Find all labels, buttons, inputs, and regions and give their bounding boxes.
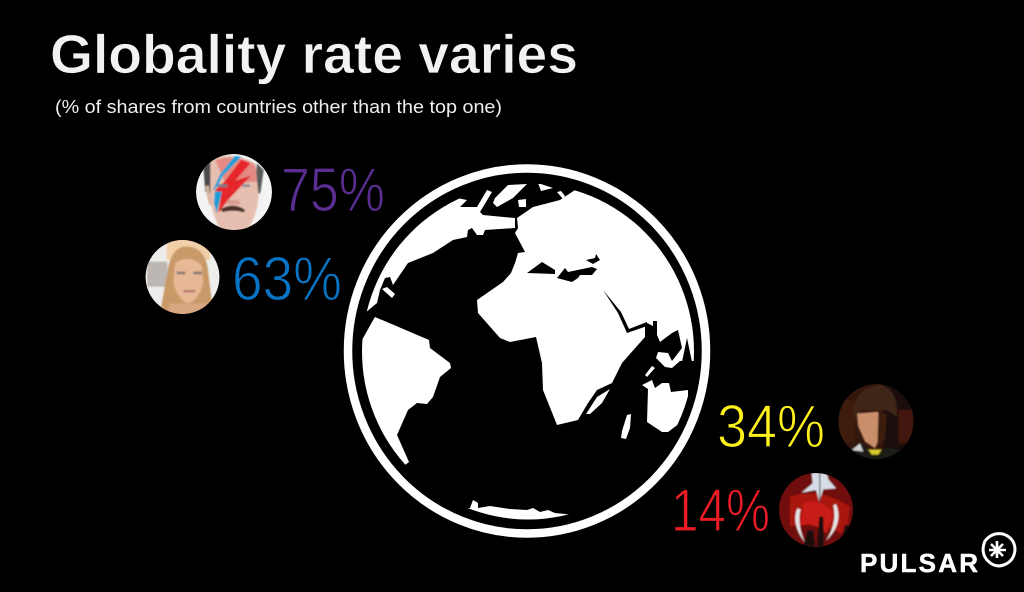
value 14%: 14% xyxy=(671,477,770,544)
title: Globality rate varies xyxy=(50,23,578,85)
globe inner seas xyxy=(527,254,692,362)
avatar: Turkish flag crowd xyxy=(779,473,853,548)
icon: pulsar star xyxy=(983,534,1015,566)
stat: 75% xyxy=(196,150,385,230)
globe land masses xyxy=(362,184,694,520)
icon: globe xyxy=(344,164,710,538)
island: Madagascar xyxy=(586,389,610,414)
avatar: man with lightning bolt make-up xyxy=(196,150,272,230)
logo: Pulsar xyxy=(860,534,1015,578)
logo wordmark: PULSAR xyxy=(860,548,978,578)
value 75%: 75% xyxy=(281,156,385,225)
value 34%: 34% xyxy=(717,393,825,460)
avatar: blonde woman xyxy=(146,237,220,317)
avatar: man looking down xyxy=(838,383,914,462)
stat: 14% xyxy=(671,473,853,548)
value 63%: 63% xyxy=(232,245,342,314)
subtitle: (% of shares from countries other than the top one) xyxy=(55,97,502,117)
globe outer ring xyxy=(348,168,706,534)
stat: 63% xyxy=(146,237,342,317)
stat: 34% xyxy=(717,383,914,462)
